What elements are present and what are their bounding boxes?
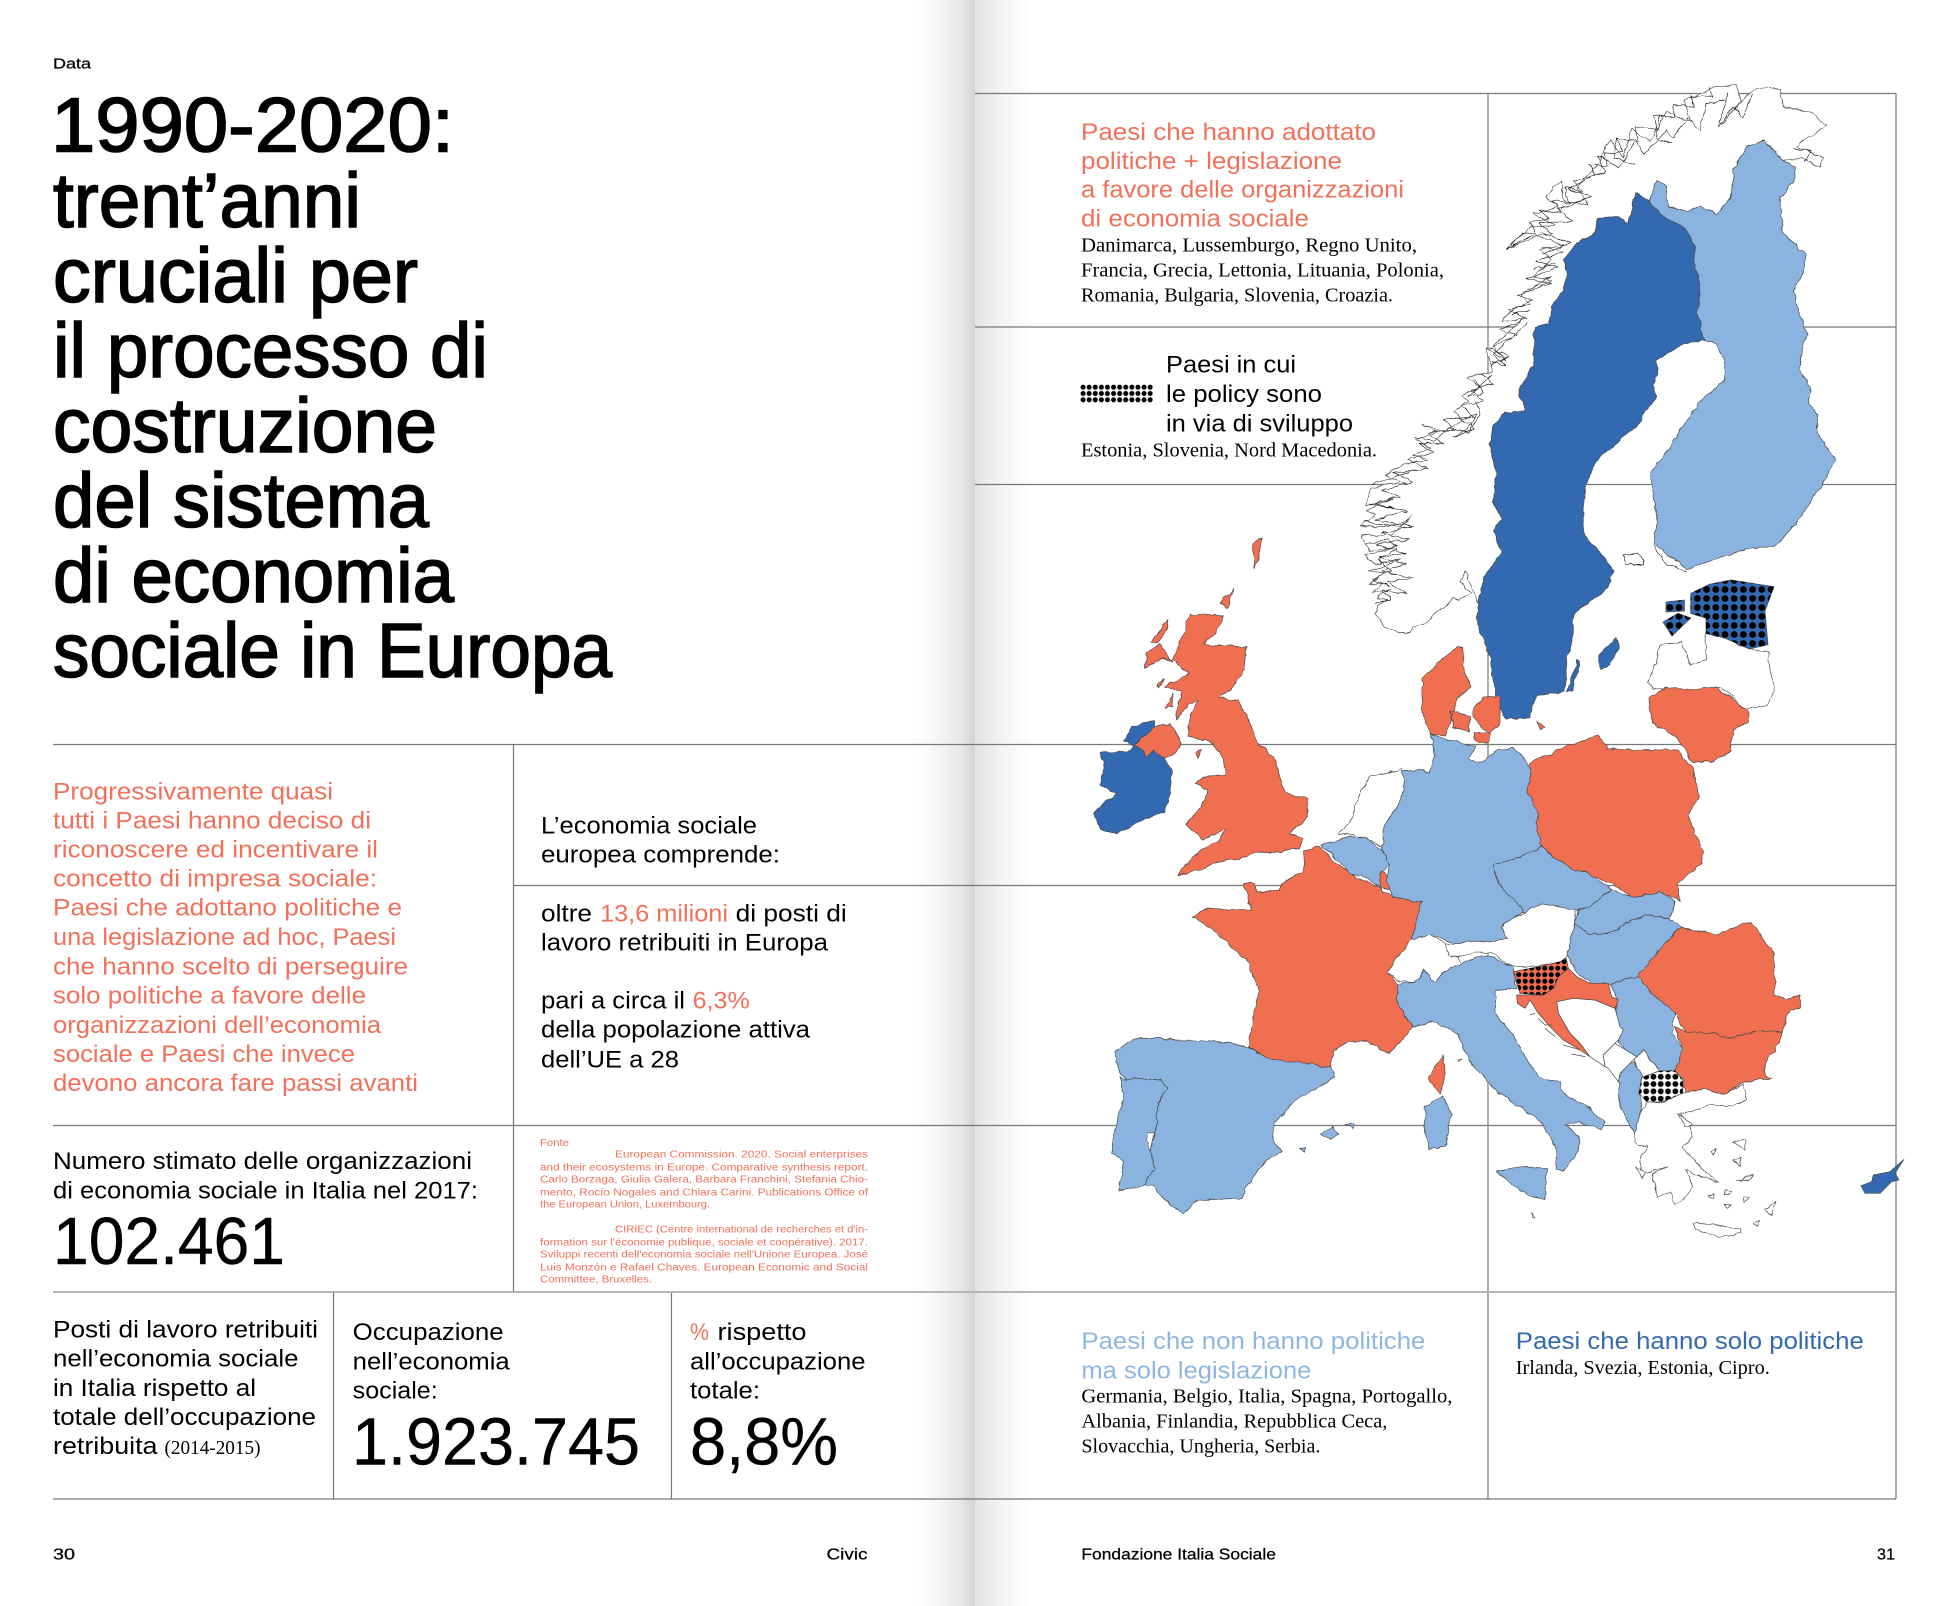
legend: policies and legislation: Romania, Bulgaria, Slovenia, Croazia. [1081, 285, 1393, 307]
stat: employment [352, 1319, 640, 1479]
spine shadow [915, 0, 1032, 1606]
stat: paid jobs heading: (2014-2015) [164, 1437, 260, 1459]
european economy figures: 13,6 milioni [600, 901, 728, 928]
North Macedonia [1639, 1071, 1683, 1102]
Serbia [1611, 976, 1683, 1071]
stat: organisations in Italy [53, 1148, 478, 1279]
Norway [1360, 84, 1827, 634]
legend: policies in development: Paesi in cui [1166, 352, 1296, 379]
european economy figures [541, 901, 847, 1073]
Norway fjord detail [1363, 87, 1811, 602]
Lithuania [1649, 687, 1749, 763]
Croatia [1517, 968, 1618, 1057]
Greek islands [1458, 1060, 1774, 1237]
sources: European Commission. 2020. Social enterprises [615, 1150, 868, 1161]
footer left: 30 [53, 1546, 75, 1564]
european economy figures: di posti di [736, 901, 847, 928]
Croatian islands [1530, 1013, 1585, 1057]
stat: employment: sociale: [353, 1377, 438, 1404]
Luxembourg [1379, 871, 1392, 890]
Dalmatia, Bosnia and Montenegro [1517, 968, 1637, 1082]
Sweden [1477, 192, 1704, 718]
Romania [1637, 921, 1800, 1038]
Kosovo [1634, 1051, 1660, 1078]
Ireland [1093, 720, 1172, 834]
Portugal [1111, 1075, 1168, 1190]
Belgium [1322, 837, 1389, 888]
intro paragraph: organizzazioni dell’economia [53, 1012, 382, 1039]
legend: policies in development: in via di sviluppo [1166, 411, 1353, 438]
stat: organisations in Italy: di economia sociale in Italia nel 2017: [53, 1177, 478, 1204]
Germany [1382, 734, 1542, 944]
sources: the European Union, Luxembourg. [540, 1200, 710, 1211]
title: il processo di [53, 308, 488, 394]
intro paragraph: devono ancora fare passi avanti [53, 1070, 418, 1097]
european economy figures: dell’UE a 28 [541, 1046, 679, 1073]
France [1193, 845, 1421, 1069]
footer left [53, 1546, 868, 1564]
legend: policies in development: le policy sono [1166, 381, 1322, 408]
footer right [1081, 1546, 1895, 1564]
european economy heading: L’economia sociale [541, 812, 757, 839]
stat: share of employment: totale: [690, 1377, 760, 1404]
sources: and their ecosystems in Europe. Comparative synthesis report. [540, 1163, 868, 1174]
legend: legislation only: Slovacchia, Ungheria, Serbia. [1081, 1436, 1320, 1458]
intro paragraph: tutti i Paesi hanno deciso di [53, 807, 371, 834]
european economy figures: oltre [541, 901, 592, 928]
legend: policies and legislation: politiche + legislazione [1081, 148, 1342, 175]
intro paragraph: Paesi che adottano politiche e [53, 895, 402, 922]
european economy figures: della popolazione attiva [541, 1017, 811, 1044]
Italy [1397, 955, 1604, 1171]
stat: share of employment: % [690, 1319, 709, 1346]
Cyprus [1861, 1159, 1904, 1193]
legend: policies in development: Estonia, Slovenia, Nord Macedonia. [1081, 440, 1377, 462]
Estonia [1663, 580, 1774, 649]
european economy figures: pari a circa il [541, 987, 685, 1014]
legend: legislation only: ma solo legislazione [1081, 1357, 1311, 1384]
legend: legislation only: Albania, Finlandia, Repubblica Ceca, [1081, 1411, 1387, 1433]
Balearic islands [1300, 1124, 1354, 1151]
legend: policies only [1516, 1328, 1864, 1379]
Montenegro [1603, 1043, 1637, 1082]
title: cruciali per [53, 233, 418, 319]
Bulgaria [1675, 1026, 1782, 1095]
intro paragraph: una legislazione ad hoc, Paesi [53, 924, 396, 951]
title: trent’anni [53, 158, 361, 244]
title: del sistema [53, 458, 429, 544]
legend: policies and legislation: Paesi che hanno adottato [1081, 119, 1376, 146]
footer left: Civic [826, 1546, 868, 1564]
Slovenia [1513, 958, 1568, 995]
title: costruzione [53, 383, 437, 469]
stat: paid jobs heading [53, 1317, 318, 1460]
stat: employment: nell’economia [353, 1348, 510, 1375]
legend: policies and legislation: di economia sociale [1081, 206, 1309, 233]
sources: Committee, Bruxelles. [540, 1275, 652, 1286]
sources: mento, Rocío Nogales and Chiara Carini. Publications Office of [540, 1188, 868, 1199]
stat: share of employment: all’occupazione [690, 1348, 866, 1375]
legend: policies in development [1081, 352, 1377, 462]
legend: legislation only [1081, 1328, 1452, 1458]
european economy heading [541, 812, 780, 869]
Austria [1445, 903, 1576, 966]
intro paragraph: solo politiche a favore delle [53, 982, 366, 1009]
sources: Luis Monzón e Rafael Chaves. European Economic and Social [540, 1263, 868, 1274]
footer right: 31 [1877, 1546, 1895, 1564]
Slovakia [1576, 890, 1675, 935]
legend: policies and legislation: Danimarca, Lussemburgo, Regno Unito, [1081, 235, 1417, 257]
Switzerland [1387, 935, 1461, 984]
stat: paid jobs heading: totale dell’occupazione [53, 1404, 316, 1431]
Oland [1567, 658, 1579, 692]
stat: employment: Occupazione [353, 1319, 504, 1346]
legend: policies only: Irlanda, Svezia, Estonia, Cipro. [1516, 1357, 1770, 1379]
stat: share of employment: rispetto [718, 1319, 806, 1346]
title: 1990-2020: [51, 82, 454, 168]
legend: policies and legislation: Francia, Grecia, Lettonia, Lituania, Polonia, [1081, 260, 1444, 282]
sources [540, 1138, 868, 1286]
legend: policies and legislation [1081, 119, 1444, 307]
Gotland [1598, 638, 1620, 670]
stat: employment: 1.923.745 [352, 1404, 640, 1479]
Greece [1634, 1084, 1746, 1205]
stat: paid jobs heading: nell’economia sociale [53, 1346, 298, 1373]
Hungary [1568, 915, 1682, 984]
title: di economia [53, 533, 454, 619]
european economy figures: lavoro retribuiti in Europa [541, 930, 829, 957]
stat: paid jobs heading: in Italia rispetto al [53, 1375, 256, 1402]
european economy heading: europea comprende: [541, 842, 780, 869]
legend: policies and legislation: a favore delle organizzazioni [1081, 177, 1404, 204]
Albania [1619, 1062, 1642, 1133]
sources: CIRIEC (Centre international de recherches et d'in- [615, 1225, 868, 1236]
Sicily [1496, 1167, 1547, 1199]
Corsica [1430, 1054, 1445, 1093]
stat: share of employment [690, 1319, 866, 1479]
sources: Fonte [540, 1138, 569, 1149]
Aland [1623, 544, 1688, 571]
intro paragraph: concetto di impresa sociale: [53, 866, 377, 893]
Poland [1527, 735, 1703, 901]
Sardinia [1425, 1095, 1451, 1149]
legend: legislation only: Germania, Belgio, Italia, Spagna, Portogallo, [1081, 1386, 1452, 1408]
section label: Data [53, 56, 92, 72]
sources: Carlo Borzaga, Giulia Galera, Barbara Franchini, Stefania Chio- [540, 1175, 868, 1186]
intro paragraph: Progressivamente quasi [53, 778, 333, 805]
Northern Ireland [1134, 724, 1182, 758]
intro paragraph: che hanno scelto di perseguire [53, 953, 408, 980]
legend: policies only: Paesi che hanno solo politiche [1516, 1328, 1864, 1355]
footer right: Fondazione Italia Sociale [1081, 1546, 1276, 1564]
map of Europe [1093, 84, 1904, 1237]
stat: paid jobs heading: Posti di lavoro retribuiti [53, 1317, 318, 1344]
Great Britain [1165, 613, 1308, 874]
stat: organisations in Italy: Numero stimato delle organizzazioni [53, 1148, 472, 1175]
Scottish islands [1145, 537, 1263, 758]
stat: share of employment: 8,8% [690, 1404, 838, 1479]
intro paragraph [53, 778, 418, 1097]
Finland [1649, 140, 1835, 569]
Czech Republic [1494, 848, 1611, 912]
stat: paid jobs heading: retribuita [53, 1433, 158, 1460]
title: sociale in Europa [53, 608, 612, 694]
title [51, 82, 612, 694]
sources: formation sur l'économie publique, sociale et coopérative). 2017. [540, 1238, 868, 1249]
Denmark [1422, 647, 1545, 742]
Spain [1114, 1037, 1336, 1214]
intro paragraph: riconoscere ed incentivare il [53, 837, 378, 864]
central and western countries [1093, 537, 1800, 1237]
legend swatch: policies in development [1080, 384, 1154, 403]
Netherlands [1338, 770, 1405, 848]
stat: organisations in Italy: 102.461 [53, 1204, 285, 1279]
legend: legislation only: Paesi che non hanno politiche [1081, 1328, 1425, 1355]
Latvia [1647, 634, 1775, 709]
european economy figures: 6,3% [693, 987, 750, 1014]
northern countries [1360, 84, 1835, 718]
Bosnia [1557, 998, 1623, 1067]
intro paragraph: sociale e Paesi che invece [53, 1041, 355, 1068]
sources: Sviluppi recenti dell'economia sociale nell'Unione Europea. José [540, 1250, 868, 1261]
